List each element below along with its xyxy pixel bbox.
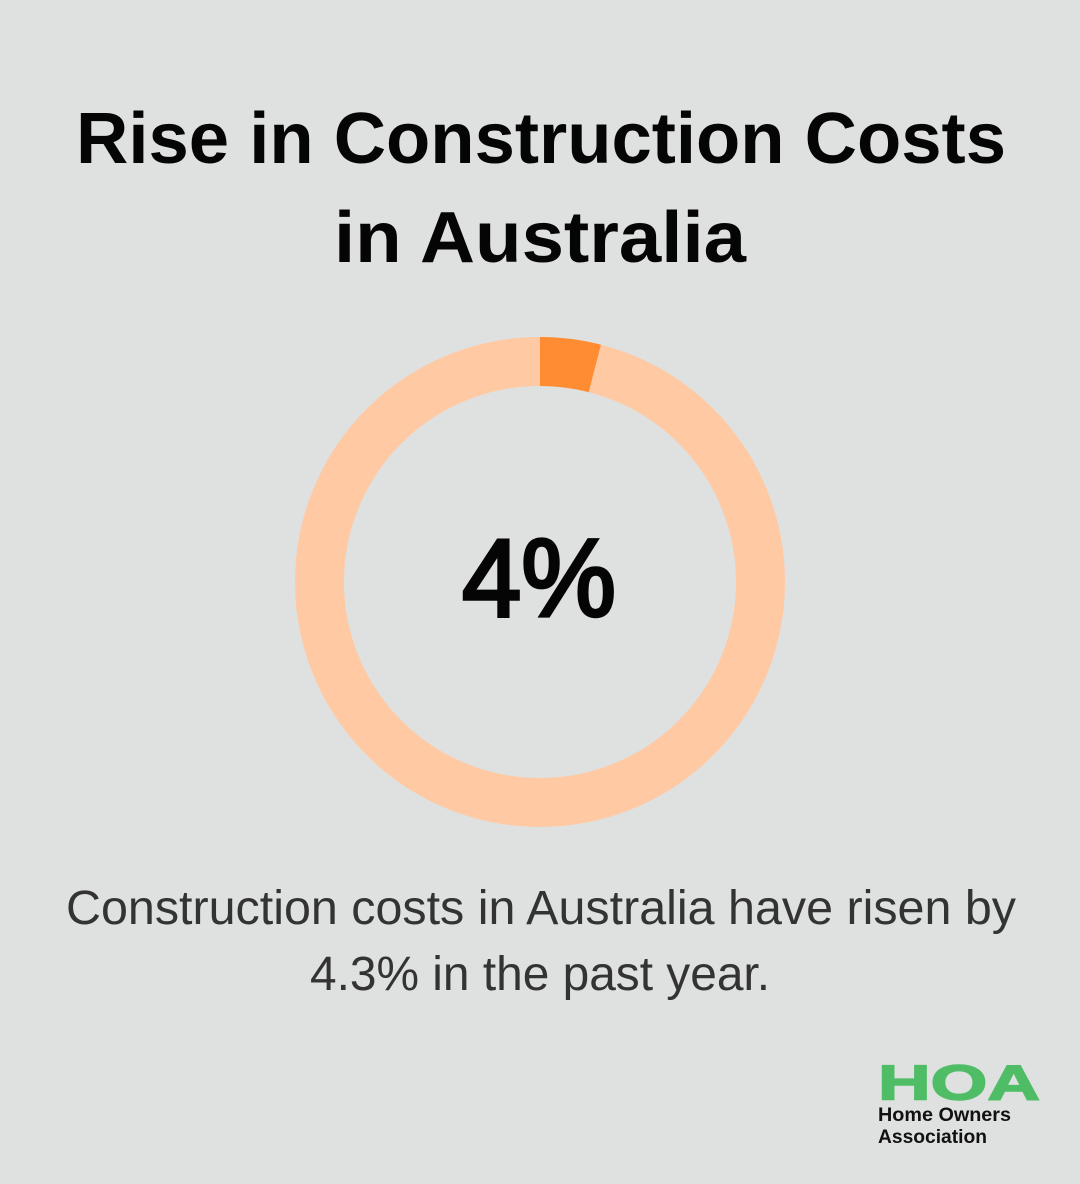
description text: Construction costs in Australia have risen by [66, 882, 1016, 935]
title: in Australia [334, 198, 747, 278]
logo wordmark: Association [878, 1127, 987, 1148]
title: Rise in Construction Costs [76, 99, 1006, 179]
description text: 4.3% in the past year. [310, 948, 770, 1001]
chart track [320, 362, 760, 802]
chart highlighted segment: 4% [540, 362, 595, 368]
description text [66, 882, 1016, 1001]
title [76, 99, 1006, 278]
donut chart [320, 362, 760, 802]
logo mark: HOA [878, 1056, 1040, 1110]
center value: 4% [462, 517, 616, 640]
logo: Home Owners Association [878, 1056, 1040, 1148]
logo wordmark [878, 1105, 1011, 1148]
logo wordmark: Home Owners [878, 1105, 1011, 1126]
